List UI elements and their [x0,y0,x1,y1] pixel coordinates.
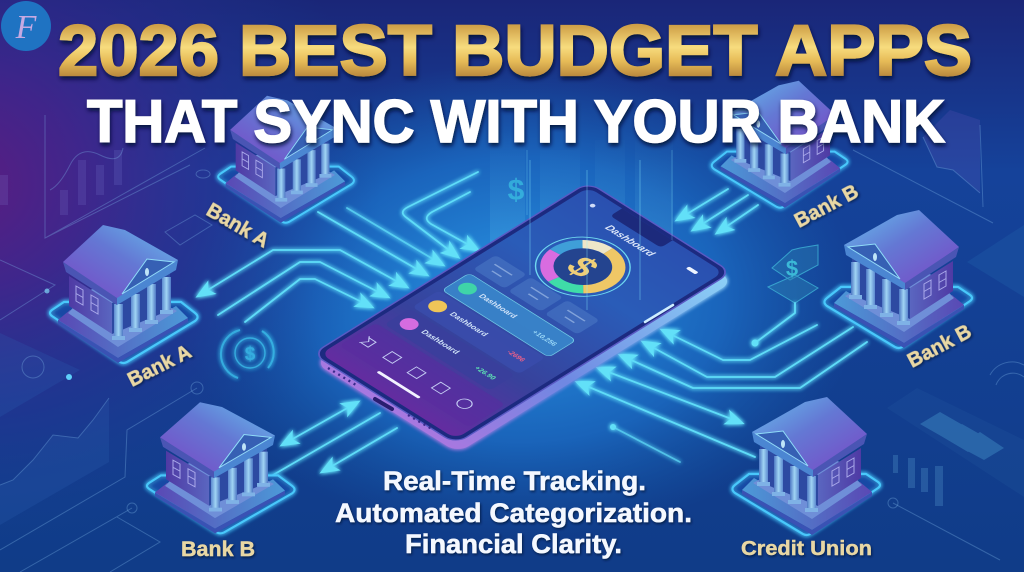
tagline line 2: Automated Categorization. [335,498,692,528]
nav bar [339,323,505,427]
pink list row: +26.90 [472,365,498,381]
arrows: upper left flows [198,172,478,322]
yellow list row [412,290,545,374]
title line 1: 2026 BEST BUDGET APPS [58,12,972,91]
bank: top left, Bank A [218,96,354,223]
donut dollar: $ [557,251,609,283]
icon: isometric dollar box right [768,245,818,303]
faint chart: upper left [0,115,212,320]
phone body edge [315,191,733,453]
teal list row [442,273,576,357]
bank: bottom left, Bank B [147,402,294,533]
label: Bank B top right: Bank B [791,181,862,232]
title line 2: THAT SYNC WITH YOUR BANK [87,88,945,155]
icon: dollar coin left [221,330,274,378]
tagline line 1: Real-Time Tracking. [383,466,646,496]
tagline [335,466,692,559]
bank: bottom right, Credit Union [732,397,880,535]
speaker grille [328,368,432,429]
faint dashboard panel: lower right [887,362,1024,560]
bank: top right, Bank B [712,81,848,208]
small stat cards [473,255,600,334]
dashboard heading: Dashboard [602,224,657,259]
logo badge: F [15,9,38,46]
label: Credit Union: Credit Union [741,538,872,560]
phone [313,182,733,453]
light beams above phone [490,130,673,330]
label: Bank A top: Bank A [202,199,273,252]
arrows: lower left flows [273,402,397,475]
yellow list row: Dashboard [447,311,490,338]
faint chart: lower left [0,333,203,572]
phone screen in isometric plane [313,182,731,444]
light beams over phone [527,150,672,310]
screen notch [610,208,673,248]
label: Bank B right: Bank B [904,321,975,372]
bank: middle left, Bank A [50,225,198,363]
faint chart: upper right [853,110,1024,297]
label: Bank B bottom: Bank B [181,538,255,561]
pink list row: Dashboard [419,328,462,355]
label: Bank A left: Bank A [124,341,195,391]
status bar [589,203,597,208]
nav icons [358,336,476,410]
teal list row: Dashboard [477,293,520,320]
charging port [375,399,392,409]
logo badge [1,1,51,51]
side button [645,305,673,322]
yellow list row: -2696 [505,349,527,363]
arrows: lower right flows [577,303,867,462]
arrows: upper right flows [677,189,758,233]
home indicator [376,371,421,399]
pink list row [384,309,515,391]
icon: floating dollar: $ [508,174,525,207]
teal list row: +10,256 [530,329,559,347]
tagline line 3: Financial Clarity. [405,529,622,559]
icon: isometric dollar box right: $ [786,256,798,281]
bank: middle right, Bank B [824,210,972,348]
donut chart [516,225,650,309]
icon: dollar coin left: $ [245,344,256,365]
